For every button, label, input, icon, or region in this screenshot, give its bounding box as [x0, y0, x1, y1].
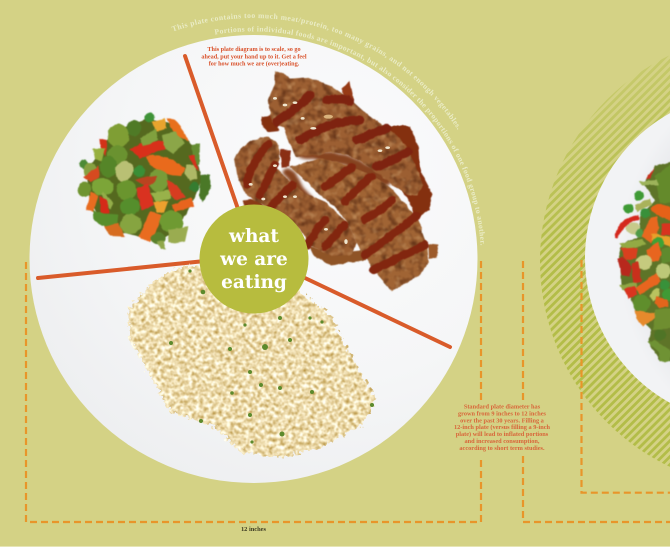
plate diameter note: according to short term studies. [459, 445, 545, 452]
plate diameter note: Standard plate diameter has [464, 404, 541, 410]
dashed line: 12-inch plate guide left section [26, 261, 481, 522]
plate diameter note: and increased consumption, [465, 438, 540, 445]
main plate [30, 35, 478, 483]
hatched 9-inch circle [539, 32, 670, 490]
curved text inner: Portions of individual foods are important, but also consider the proportions of one food group to another. [214, 26, 485, 246]
divider lines [38, 56, 450, 347]
plate diameter note: plate) will lead to inflated portions [456, 431, 549, 438]
scale note: for how much we are (over)eating. [209, 60, 300, 68]
sauce pools [242, 127, 438, 266]
dashed line: 12-inch plate guide right section [523, 261, 670, 522]
sauce stripes upper [277, 95, 408, 167]
center circle label: we are [219, 249, 288, 270]
scale note: ahead, put your hand up to it. Get a feel [201, 54, 307, 60]
center circle label: eating [221, 272, 287, 293]
12 inches label: 12 inches [241, 526, 267, 533]
sauce stripes lower [247, 144, 425, 270]
center circle label: what [228, 226, 279, 247]
scale note: This plate diagram is to scale, so go [207, 46, 301, 53]
curved text outer: This plate contains too much meat/protein, too many grains, and not enough vegetables. [172, 14, 459, 130]
sauce under gaps between chicken pieces [288, 152, 385, 232]
herb flecks [169, 269, 374, 444]
plate diameter note: over the past 30 years. Filling a [460, 417, 545, 424]
chicken with sauce [234, 71, 438, 291]
plate diameter note: 12-inch plate (versus filling a 9-inch [454, 424, 551, 431]
right plate vegetables [615, 162, 670, 362]
right plate [585, 92, 670, 424]
chicken lower pieces [234, 137, 428, 291]
vegetables on main plate [78, 112, 211, 249]
rice [128, 266, 376, 457]
center circle label [200, 204, 308, 314]
dashed line: 9-inch plate guide [582, 260, 670, 493]
chicken upper piece [268, 71, 423, 195]
plate diameter note: grown from 9 inches to 12 inches [458, 410, 547, 418]
bottom edge strip [0, 546, 670, 547]
scale note [201, 46, 307, 68]
sesame seeds [249, 97, 390, 244]
plate diameter note [454, 404, 551, 452]
